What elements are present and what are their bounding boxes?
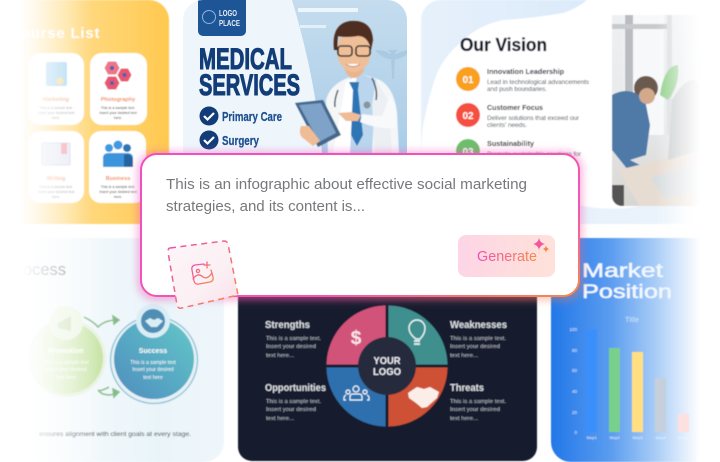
item 02: Customer Focus bbox=[487, 103, 543, 112]
SWOT wheel bbox=[326, 306, 448, 426]
SWOT: threats bbox=[450, 383, 506, 422]
SWOT: opportunities: This is a sample text. bbox=[266, 399, 321, 405]
arrows bbox=[84, 316, 119, 397]
heading: market position: Market bbox=[582, 260, 664, 282]
bar chart: 20 bbox=[572, 410, 577, 415]
SWOT: strengths bbox=[265, 320, 321, 359]
SWOT: weaknesses: Insert your desired bbox=[450, 344, 500, 350]
panel: prompt input bbox=[141, 154, 579, 308]
card: our vision bbox=[421, 0, 700, 224]
bar chart: Step3 bbox=[632, 435, 644, 440]
item 01 bbox=[456, 67, 589, 93]
tile: writing: here. bbox=[52, 195, 60, 199]
heading: market position bbox=[582, 260, 672, 303]
bar chart: 0 bbox=[574, 430, 577, 435]
tile: writing bbox=[28, 131, 84, 203]
item 01: Innovation Leadership bbox=[487, 67, 564, 76]
SWOT: strengths: text here... bbox=[266, 353, 294, 359]
bar chart: 60 bbox=[572, 368, 577, 373]
bar chart: Step5 bbox=[678, 435, 690, 440]
SWOT: threats: text here... bbox=[450, 416, 478, 422]
step: success: text here bbox=[143, 375, 163, 381]
bar chart bbox=[569, 315, 690, 440]
bar chart: Step2 bbox=[609, 435, 621, 440]
SWOT: threats: Threats bbox=[450, 383, 484, 394]
heading: market position: Position bbox=[582, 281, 672, 303]
tile: photography: here. bbox=[114, 116, 122, 120]
tile: business: Business bbox=[106, 176, 130, 182]
photo: office team bbox=[612, 15, 700, 206]
heading: course list: Course List bbox=[9, 25, 100, 42]
step: success: Success bbox=[139, 348, 167, 355]
tile: photography bbox=[90, 53, 147, 125]
list item: surgery bbox=[200, 130, 260, 150]
tile: business: Insert your desired text bbox=[99, 190, 137, 194]
icon: dollar: $ bbox=[351, 328, 362, 349]
SWOT: weaknesses: Weaknesses bbox=[450, 320, 507, 331]
icon: handshake bbox=[408, 387, 439, 408]
illustration: doctor bbox=[295, 21, 399, 153]
SWOT: opportunities: Insert your desired bbox=[266, 407, 316, 413]
logo badge: PLACE bbox=[219, 19, 241, 28]
SWOT: opportunities bbox=[265, 383, 326, 422]
logo badge bbox=[198, 0, 246, 36]
bar chart: 100 bbox=[569, 327, 577, 332]
SWOT wheel: LOGO bbox=[373, 367, 401, 378]
tile: photography: Photography bbox=[101, 97, 136, 103]
item 03 bbox=[456, 139, 581, 163]
step: promotion: Insert your desired bbox=[45, 367, 87, 373]
tile: photography: Insert your desired text bbox=[99, 111, 137, 115]
background caduceus bbox=[375, 50, 407, 79]
icon: image sparkle bbox=[192, 262, 213, 284]
SWOT: weaknesses bbox=[450, 320, 507, 359]
item 02: Deliver solutions that exceed our bbox=[487, 116, 579, 122]
card: process bbox=[0, 238, 224, 462]
SWOT: weaknesses: This is a sample text. bbox=[450, 336, 506, 342]
heading: our vision: Our Vision bbox=[460, 35, 547, 55]
SWOT: opportunities: text here... bbox=[266, 416, 294, 422]
tile: business: This is a sample text. bbox=[101, 185, 135, 189]
prompt text: strategies, and its content is... bbox=[166, 199, 365, 215]
card: market position bbox=[551, 238, 720, 462]
item 03: 03 bbox=[462, 147, 474, 158]
card: medical services bbox=[183, 0, 411, 153]
prompt text: This is an infographic about effective social marketing bbox=[166, 177, 527, 193]
tile: marketing bbox=[28, 53, 84, 125]
bar chart: 40 bbox=[572, 389, 577, 394]
bar chart: 80 bbox=[572, 348, 577, 353]
glow behind input panel bbox=[137, 151, 583, 301]
item 02: 02 bbox=[462, 111, 474, 122]
step: promotion bbox=[28, 306, 106, 397]
title: medical services: SERVICES bbox=[199, 69, 300, 102]
SWOT: threats: Insert your desired bbox=[450, 407, 500, 413]
tile: marketing: Insert your desired text bbox=[38, 111, 74, 115]
title: medical services bbox=[199, 48, 300, 96]
step: promotion: Promotion bbox=[48, 348, 84, 355]
tile: photography: This is a sample text. bbox=[101, 106, 135, 110]
title: medical services: MEDICAL bbox=[199, 43, 292, 76]
button: generate: Generate bbox=[477, 249, 537, 265]
list item: primary care: Primary Care bbox=[222, 109, 282, 124]
tile: business: here. bbox=[114, 195, 122, 199]
step: success: Insert your desired bbox=[132, 367, 174, 373]
item 02: clients' needs. bbox=[487, 123, 527, 129]
SWOT: strengths: Insert your desired bbox=[266, 344, 316, 350]
tile: marketing: here. bbox=[52, 116, 60, 120]
tile: writing: Insert your desired text bbox=[38, 190, 74, 194]
item 01: 01 bbox=[462, 75, 474, 86]
step: promotion: text here bbox=[56, 375, 76, 381]
logo badge: LOGO bbox=[219, 9, 237, 18]
icon: people bbox=[344, 386, 369, 400]
tile: writing: This is a sample text. bbox=[39, 185, 73, 189]
icon: light bulb bbox=[409, 320, 425, 344]
tile: business bbox=[89, 131, 146, 203]
item 01: Lead in technological advancements bbox=[487, 80, 589, 86]
tile: marketing: Marketing bbox=[43, 97, 69, 103]
SWOT: strengths: This is a sample text. bbox=[266, 336, 321, 342]
tile: marketing: This is a sample text. bbox=[39, 106, 73, 110]
list item: surgery: Surgery bbox=[222, 133, 260, 148]
SWOT: strengths: Strengths bbox=[265, 320, 310, 331]
tile: writing: Writing bbox=[47, 176, 65, 182]
button: generate bbox=[458, 235, 555, 277]
item 02 bbox=[456, 103, 579, 129]
card: SWOT bbox=[238, 290, 537, 461]
SWOT: threats: This is a sample text. bbox=[450, 399, 506, 405]
list item: primary care bbox=[200, 106, 282, 126]
bar chart: Step4 bbox=[655, 435, 667, 440]
bar chart: Step1 bbox=[586, 435, 598, 440]
bar chart: Title bbox=[625, 315, 639, 324]
SWOT: opportunities: Opportunities bbox=[265, 383, 326, 394]
item 03: Promote sustainable practices for bbox=[487, 152, 581, 158]
step: success bbox=[110, 304, 198, 404]
prompt text bbox=[166, 177, 527, 215]
upload tile bbox=[168, 241, 238, 308]
item 01: and push boundaries. bbox=[487, 87, 547, 93]
item 03: Sustainability bbox=[487, 139, 535, 148]
step: promotion: This is a sample text bbox=[43, 360, 89, 366]
heading: process: ocess bbox=[23, 260, 66, 279]
card: course list bbox=[0, 0, 169, 226]
SWOT: weaknesses: text here... bbox=[450, 353, 478, 359]
caption: process: ensures alignment with client goals at every stage. bbox=[39, 431, 191, 438]
SWOT wheel: YOUR bbox=[374, 356, 401, 367]
fade: photo right edge bbox=[655, 0, 700, 224]
step: success: This is a sample text bbox=[130, 360, 176, 366]
